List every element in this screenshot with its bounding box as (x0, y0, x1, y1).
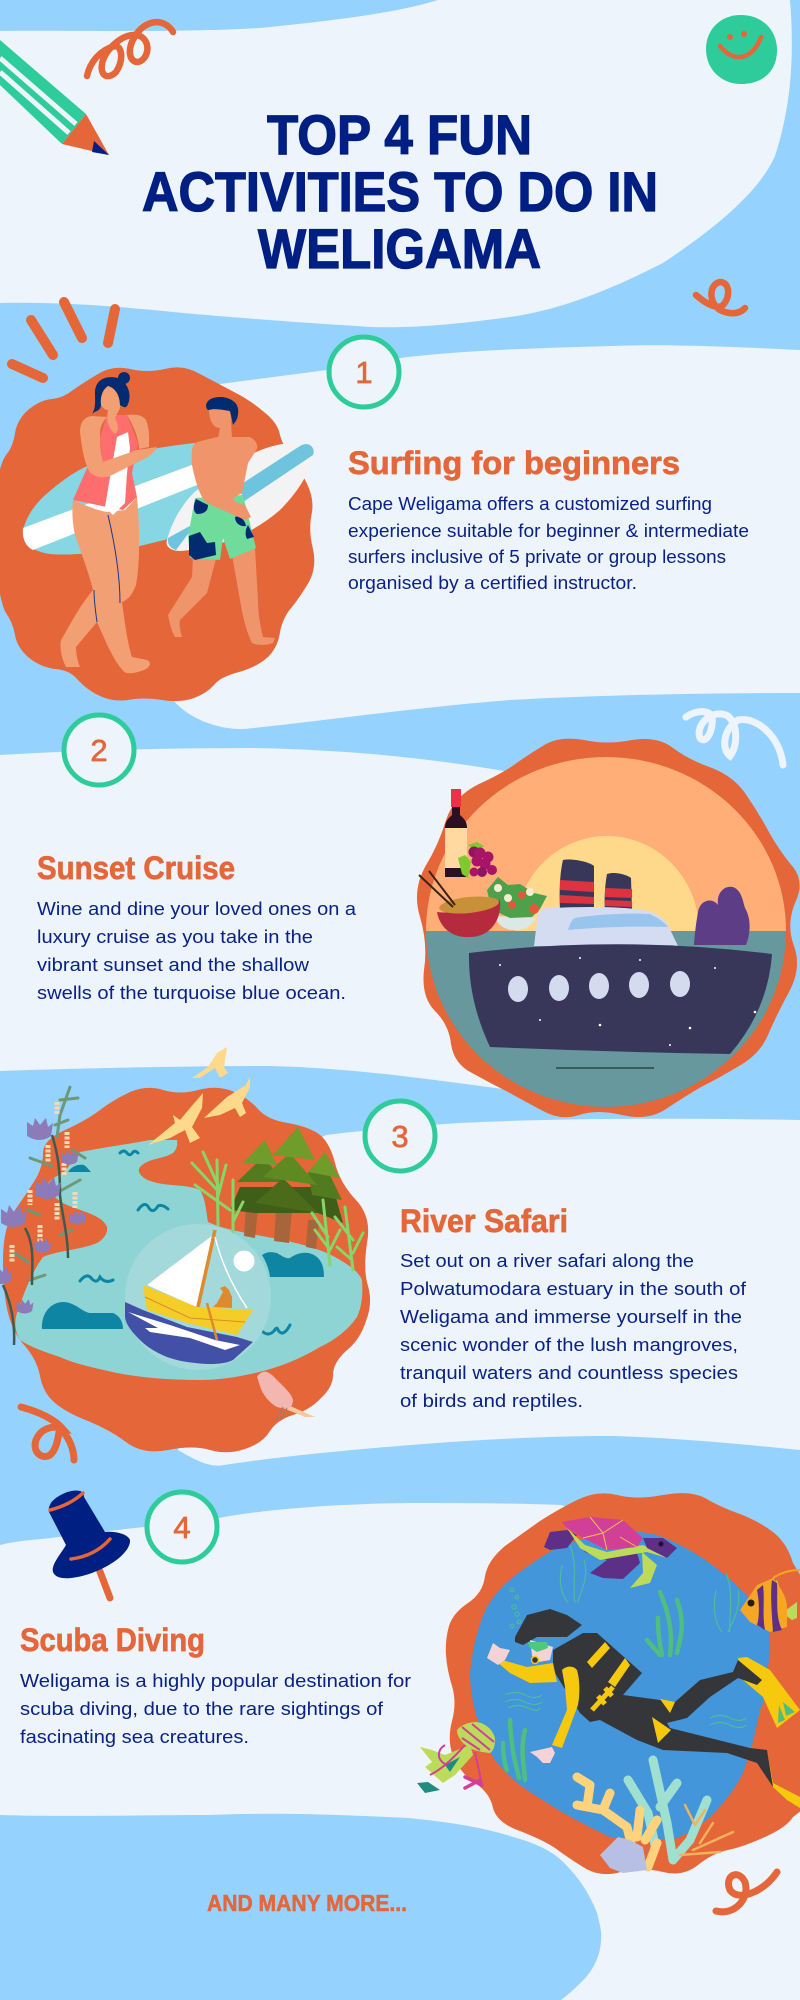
description: river safari: tranquil waters and countless species (400, 1362, 738, 1383)
belly (567, 1528, 667, 1588)
sea (426, 931, 786, 1107)
water (470, 1532, 770, 1840)
wake line (556, 1067, 654, 1069)
panel: sunset cruise illustration (417, 739, 800, 1117)
trees (230, 1127, 343, 1249)
thin seaweed and ripples (505, 1545, 746, 1728)
oar (207, 1303, 217, 1340)
icon: bottom right squiggle (716, 1872, 777, 1912)
river (15, 1140, 362, 1380)
sun (515, 836, 699, 931)
portholes (508, 971, 690, 1002)
description: river safari: Set out on a river safari along the (400, 1250, 694, 1271)
sea under boat (125, 1302, 253, 1364)
icon: right squiggle (696, 282, 745, 313)
number badge 2 (64, 715, 134, 785)
hair bun (118, 372, 130, 384)
closing text: AND MANY MORE... (207, 1890, 407, 1916)
moon (234, 1250, 254, 1272)
description: surfing: surfers inclusive of 5 private or group lessons (348, 546, 726, 567)
number badge 1: 1 (355, 355, 373, 390)
ship hull (469, 944, 772, 1054)
description: surfing: experience suitable for beginner & intermediate (348, 520, 749, 541)
description: sunset cruise: swells of the turquoise blue ocean. (37, 982, 346, 1003)
background: section 2 wave (0, 748, 700, 1090)
surfboards (23, 443, 314, 555)
shell (562, 1517, 643, 1550)
number badge 1 (329, 337, 399, 407)
fins (738, 1657, 800, 1728)
icon: burst rays (12, 302, 115, 378)
boatman (213, 1286, 232, 1308)
panel: river safari illustration (0, 1047, 370, 1452)
reeds (192, 1152, 363, 1270)
description: river safari: Weligama and immerse yourself in the (400, 1306, 742, 1327)
icon: pencil (0, 40, 109, 155)
wine bottle (445, 789, 467, 877)
corals (577, 1760, 733, 1873)
icon: smiley (706, 15, 777, 84)
purple flowers (0, 1118, 86, 1314)
title: ACTIVITIES TO DO IN (142, 160, 658, 223)
diver (487, 1609, 800, 1808)
dark stems (3, 1135, 68, 1345)
waves (80, 1151, 290, 1334)
head (643, 1538, 677, 1558)
chopsticks (419, 871, 455, 907)
text block: sunset cruise (37, 850, 357, 1003)
mask (528, 1642, 548, 1652)
short patches (189, 499, 254, 560)
noodle bowl (437, 894, 500, 937)
title: WELIGAMA (258, 217, 541, 280)
description: surfing: organised by a certified instructor. (348, 572, 637, 593)
regulator (532, 1656, 538, 1664)
icon: push pin (49, 1490, 130, 1598)
description: sunset cruise: luxury cruise as you take in the (37, 926, 313, 947)
background: section 3 wave (178, 1119, 800, 1466)
background: footer blue blob (0, 1814, 601, 2000)
description: river safari: scenic wonder of the lush mangroves, (400, 1334, 738, 1355)
title: TOP 4 FUN (267, 103, 532, 166)
hands (487, 1643, 510, 1665)
hair (92, 377, 130, 414)
orange blob (3, 1088, 370, 1452)
neck and face (99, 386, 120, 434)
couple silhouette (694, 887, 750, 945)
hull (143, 1285, 253, 1335)
shoulders and arm (80, 415, 157, 477)
description: sunset cruise (37, 898, 357, 1003)
torso and arm (192, 437, 257, 520)
icon: top squiggle (87, 22, 173, 76)
jellyfish (417, 1722, 495, 1793)
sail boat (125, 1230, 253, 1364)
description: scuba diving: fascinating sea creatures. (20, 1726, 249, 1747)
man surfer (168, 397, 275, 645)
number badge 4 (147, 1492, 217, 1562)
face (530, 1640, 553, 1663)
hills (42, 1165, 324, 1329)
turtle (544, 1517, 677, 1588)
number badge 3: 3 (391, 1119, 409, 1154)
legs (61, 497, 150, 673)
title (142, 103, 658, 280)
flippers and body (544, 1530, 640, 1579)
panel: surfing illustration (0, 367, 314, 701)
flowering plants (0, 1087, 86, 1345)
heading: river safari: River Safari (400, 1203, 568, 1239)
description: scuba diving: Weligama is a highly popular destination for (20, 1670, 411, 1691)
neck and face (209, 402, 232, 438)
sky (426, 757, 786, 931)
description: sunset cruise: vibrant sunset and the shallow (37, 954, 310, 975)
woman surfer (61, 372, 157, 673)
wetsuit (553, 1633, 773, 1787)
number badge 4: 4 (173, 1510, 191, 1545)
text block: surfing (348, 445, 749, 593)
seed clusters (12, 1102, 75, 1262)
icon: white squiggle (686, 712, 783, 765)
sail boat bubble (125, 1224, 271, 1370)
hair (206, 397, 238, 425)
ship superstructure (534, 907, 678, 946)
text block: scuba diving (20, 1622, 411, 1747)
description: surfing: Cape Weligama offers a customized surfing (348, 493, 712, 514)
description: scuba diving: scuba diving, due to the rare sightings of (20, 1698, 384, 1719)
background: header wave (0, 0, 792, 327)
description: river safari: Polwatumodara estuary in the south of (400, 1278, 747, 1299)
description: river safari: of birds and reptiles. (400, 1390, 583, 1411)
small bird (257, 1372, 315, 1420)
panel: scuba diving illustration (417, 1493, 800, 1874)
background: section 1 wave (173, 345, 800, 729)
number badge 3 (365, 1101, 435, 1171)
grapes (458, 842, 497, 878)
hair and hood (515, 1609, 582, 1645)
heading: surfing: Surfing for beginners (348, 445, 680, 481)
heading: sunset cruise: Sunset Cruise (37, 850, 235, 886)
orange blob (417, 739, 800, 1117)
seaweed (503, 1592, 682, 1780)
hull stars (499, 957, 756, 1046)
icon: lower left squiggle (21, 1407, 74, 1460)
tank straps (587, 1642, 630, 1687)
arms (498, 1660, 557, 1683)
description: scuba diving (20, 1670, 411, 1747)
orange blob (0, 367, 314, 701)
shorts (188, 495, 256, 560)
ship funnels (560, 859, 632, 912)
number badge 2: 2 (90, 733, 108, 768)
orange blob (446, 1493, 800, 1874)
description: surfing (348, 493, 749, 593)
description: river safari (400, 1250, 747, 1411)
salad (487, 877, 547, 930)
text block: river safari (400, 1203, 747, 1411)
heading: scuba diving: Scuba Diving (20, 1622, 205, 1658)
suit accents (652, 1699, 675, 1743)
leg line (94, 515, 120, 622)
white surf (128, 1312, 240, 1350)
birds (148, 1047, 250, 1145)
background: section 4 wave (0, 1503, 800, 2000)
legs (168, 548, 275, 645)
description: sunset cruise: Wine and dine your loved ones on a (37, 898, 357, 919)
fish (740, 1570, 800, 1632)
swimsuit (73, 415, 138, 510)
leafy stems (10, 1087, 85, 1280)
